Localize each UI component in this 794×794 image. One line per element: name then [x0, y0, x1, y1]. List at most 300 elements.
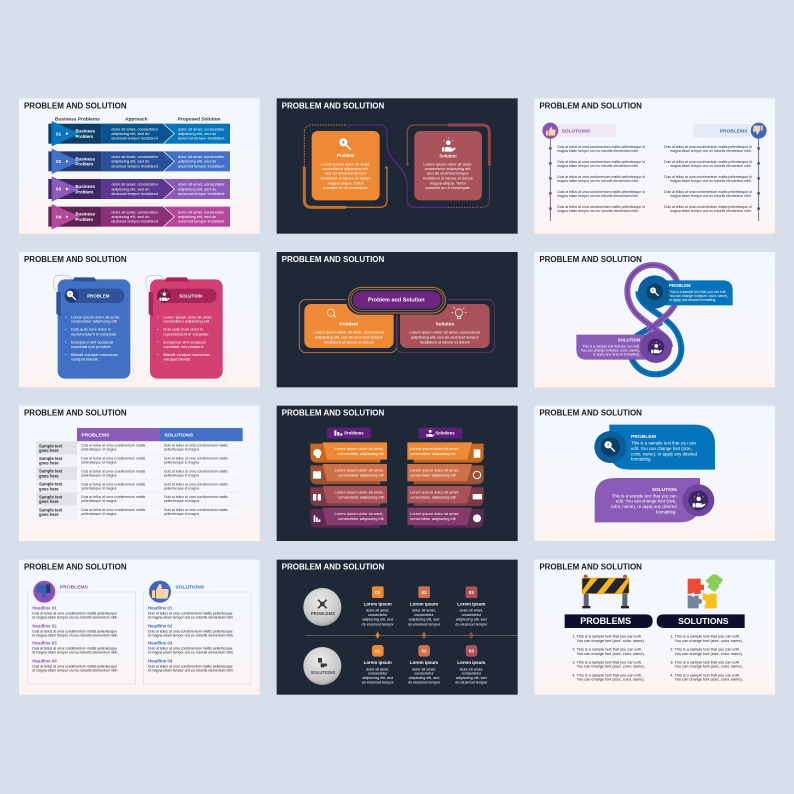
solution item 02: do eiusmod tempor [408, 681, 441, 685]
column headers: Business Problems [55, 117, 100, 123]
solution callout: edit. You can change font (size, [616, 499, 677, 504]
problems column: Duis at tellus at urna condimentum mattis pellentesque id [664, 205, 752, 209]
row 03: adipiscing elit, sed do [111, 186, 150, 191]
solutions column: magna etiam tempor orci eu lobortis elementum nibh. [557, 194, 639, 198]
problem card: posuere ac ut consequat. [323, 185, 368, 190]
solutions panel: Duis at tellus at urna condimentum mattis pellentesque [148, 664, 233, 668]
problem callout [594, 425, 715, 470]
row 03: eiusmod tempor incididunt [178, 191, 225, 196]
problem card: incididunt ut labore et dolore [321, 175, 371, 180]
problem item 02: do eiusmod tempor [408, 622, 441, 626]
row 04: dolor sit amet, consectetur [178, 209, 225, 214]
row 02: eiusmod tempor incididunt [111, 163, 159, 168]
title: PROBLEM AND SOLUTION [24, 562, 127, 571]
problems panel: PROBLEMS [60, 585, 89, 591]
solutions ribbons: consectetur adipiscing elit [410, 516, 457, 521]
problem callout: You can change font(size, color, name), [669, 294, 728, 298]
row labels: goes here [39, 448, 59, 453]
row labels: goes here [39, 499, 59, 504]
solutions column text: Duis at tellus at urna condimentum mattis [164, 444, 228, 448]
problems panel: id magna etiam tempor orci eu lobortis elementum nibh. [32, 651, 118, 655]
problems list: You can change font (size, color, name). [577, 652, 645, 656]
icon: hand with bulb [157, 289, 171, 303]
solutions ribbons: consectetur adipiscing elit [410, 451, 457, 456]
solution card: Solution [436, 322, 454, 327]
row labels: goes here [39, 473, 59, 478]
problem card: Excepteur sint occaecat [71, 339, 114, 344]
solution item 02: consectetur [414, 672, 434, 676]
solutions list: 1. [670, 635, 674, 639]
row 04: Problem [75, 217, 93, 222]
solutions ribbons [407, 442, 484, 528]
slide 2: dark two cards with connector [277, 98, 518, 234]
problems list [572, 635, 645, 682]
solutions banner [657, 614, 745, 628]
solutions list: 4. [670, 673, 674, 677]
problem callout: This is a sample text that you can edit. [669, 290, 726, 294]
problem card: consectetur adipiscing elit, [322, 166, 369, 171]
icon: hand with bulb [693, 494, 706, 507]
solutions list: 2. [670, 648, 674, 652]
problems list: This is a sample text that you can edit. [577, 648, 642, 652]
solution callout [595, 478, 714, 522]
solution item 01: 01 [375, 649, 381, 654]
row 03: 03 [56, 187, 62, 192]
timeline divider [306, 634, 518, 636]
problems column: Duis at tellus at urna condimentum mattis pellentesque id [664, 145, 752, 149]
problem item 03: 03 [469, 590, 474, 595]
icon: hand with bulb [651, 342, 662, 353]
solution card: magna aliqua. Tortor [430, 180, 467, 185]
problems column: PROBLEMS [720, 128, 748, 134]
solutions list: This is a sample text that you can edit. [675, 660, 740, 664]
row labels: goes here [39, 512, 59, 517]
table header: PROBLEMS [81, 432, 110, 438]
problem item 03: adipiscing elit, sed [456, 618, 487, 622]
row 01: Business [75, 129, 96, 134]
row 02: eiusmod tempor incididunt [178, 163, 225, 168]
solutions ribbons: Lorem ipsum dolor sit amet, [410, 511, 459, 516]
slide 11: dark timeline [277, 560, 518, 695]
row 03 [48, 176, 230, 202]
problem item 01: adipiscing elit, sed [362, 618, 393, 622]
problems panel: id magna etiam tempor orci eu lobortis elementum nibh. [32, 668, 118, 672]
row 02: Problem [75, 162, 93, 167]
problem callout: PROBLEM [631, 434, 656, 440]
solution item 01: do eiusmod tempor [362, 681, 394, 685]
solution card: adipiscing elit, sed do eiusmod tempor [411, 334, 480, 339]
purple loop [627, 265, 679, 347]
problems panel: Duis at tellus at urna condimentum mattis pellentesque [32, 612, 117, 616]
solutions panel: id magna etiam tempor orci eu lobortis elementum nibh. [148, 633, 234, 637]
problem item 02: adipiscing elit, sed [409, 618, 439, 622]
problems ribbons: consectetur adipiscing elit [338, 494, 385, 499]
problems column text: Duis at tellus at urna condimentum mattis [81, 457, 145, 461]
solutions column: magna etiam tempor orci eu lobortis elementum nibh. [557, 179, 639, 183]
icon: magnifier [65, 289, 79, 303]
problem item 03 [455, 586, 488, 626]
title: PROBLEM AND SOLUTION [282, 563, 385, 572]
solution item 01 [362, 645, 394, 685]
solution item 02: 02 [421, 649, 427, 654]
solutions column text: pellentesque id magna [164, 461, 199, 465]
row 01: 01 [56, 131, 62, 136]
problem card [304, 304, 394, 348]
solutions list: You can change font (size, color, name). [675, 652, 743, 656]
solution card: Duis aute irure dolor in [163, 327, 203, 332]
solution card: cupidatat non proident. [163, 344, 204, 349]
column headers: Proposed Solution [178, 117, 221, 123]
row labels: Sample text [39, 494, 63, 499]
problems column text: pellentesque id magna [81, 461, 116, 465]
solution item 02: dolor sit amet, [412, 667, 436, 671]
slide 7: comparison table [19, 406, 260, 541]
solutions panel: Duis at tellus at urna condimentum mattis pellentesque [148, 612, 233, 616]
problems list: You can change font (size, color, name). [577, 665, 645, 669]
slide 5: dark joined cards with pill [277, 252, 518, 387]
row 01: eiusmod tempor incididunt [178, 136, 225, 141]
row 04: 04 [56, 214, 62, 219]
icon: road barrier [582, 575, 629, 608]
problems list: 1. [572, 635, 576, 639]
solutions panel: Headline 02 [148, 623, 173, 628]
problem card: Lorem ipsum dolor sit amet, [71, 314, 120, 319]
problems panel: Headline 04 [32, 658, 57, 663]
slide 6: figure-eight diagram [534, 252, 775, 387]
problems column text: Duis at tellus at urna condimentum mattis [81, 482, 145, 486]
solutions panel: id magna etiam tempor orci eu lobortis elementum nibh. [148, 616, 234, 620]
problems column: magna etiam tempor orci eu lobortis elementum nibh. [670, 209, 752, 213]
problems panel: id magna etiam tempor orci eu lobortis elementum nibh. [32, 616, 118, 620]
solution item 01: adipiscing elit, sed [362, 676, 393, 680]
row 03: Problem [75, 189, 93, 194]
problem card: sed do eiusmod tempor [325, 171, 367, 176]
problem item 03: consectetur [462, 613, 482, 617]
problems column: Duis at tellus at urna condimentum mattis pellentesque id [664, 175, 752, 179]
problem item 03: Lorem ipsum [457, 601, 485, 606]
solution card: Excepteur sint occaecat [163, 339, 207, 344]
solutions column: Duis at tellus at urna condimentum mattis pellentesque id [557, 190, 645, 194]
problem card: PROBLEM [87, 293, 110, 298]
icon: thumb up [149, 581, 171, 603]
problem card: Duis aute irure dolor in [71, 327, 111, 332]
center pill [346, 286, 448, 315]
solutions banner: SOLUTIONS [678, 616, 729, 626]
row 02: dolor sit amet, consectetur [111, 154, 159, 159]
solutions column: Duis at tellus at urna condimentum mattis pellentesque id [557, 145, 645, 149]
problem callout: or apply any desired formatting. [669, 298, 716, 302]
problem item 01: dolor sit amet, [366, 609, 389, 613]
problems column: magna etiam tempor orci eu lobortis elementum nibh. [670, 179, 752, 183]
problem card: reprehenderit in voluptate. [71, 331, 117, 336]
blue loop [630, 291, 681, 374]
row labels [39, 443, 63, 517]
solution card: Lorem ipsum dolor sit amet, [163, 314, 213, 319]
solution callout: This is a sample text that you can [612, 494, 677, 499]
problems column text: pellentesque id magna [81, 448, 116, 452]
solutions column text: pellentesque id magna [164, 486, 199, 490]
solutions column: magna etiam tempor orci eu lobortis elementum nibh. [557, 149, 639, 153]
solutions list: You can change font (size, color, name). [675, 665, 743, 669]
solutions ribbons: consectetur adipiscing elit [410, 473, 457, 478]
solutions panel: Duis at tellus at urna condimentum mattis pellentesque [148, 629, 233, 633]
column headers [55, 117, 221, 123]
row 04 [48, 204, 230, 229]
problems sphere [303, 588, 341, 626]
solutions column text: pellentesque id magna [164, 512, 199, 516]
solutions column text: pellentesque id magna [164, 473, 199, 477]
solution item 02: Lorem ipsum [410, 660, 438, 665]
problems ribbons: consectetur adipiscing elit [338, 473, 385, 478]
solutions list: This is a sample text that you can edit. [675, 648, 740, 652]
icon: magnifier outline [327, 309, 336, 317]
slide 10: headline lists [19, 560, 260, 695]
problem card: Problem [339, 322, 358, 327]
problems column text: pellentesque id magna [81, 499, 116, 503]
solutions list: You can change font (size, color, name). [675, 678, 743, 682]
solution callout: formatting. [656, 509, 677, 514]
solutions panel: id magna etiam tempor orci eu lobortis elementum nibh. [148, 651, 234, 655]
problem item 01 [362, 586, 394, 626]
table header [77, 428, 243, 441]
solutions column: Duis at tellus at urna condimentum mattis pellentesque id [557, 175, 645, 179]
solution card [146, 275, 226, 381]
problem callout: PROBLEM [669, 283, 691, 288]
row labels: Sample text [39, 482, 63, 487]
problems column: magna etiam tempor orci eu lobortis elementum nibh. [670, 164, 752, 168]
problems banner [565, 614, 653, 628]
problem item 02: dolor sit amet, [412, 609, 436, 613]
icon: hand with bulb [442, 137, 456, 152]
problem card: consectetur adipiscing elit. [71, 319, 118, 324]
problems column [664, 123, 767, 221]
problems ribbons: consectetur adipiscing elit [338, 451, 385, 456]
solutions list: This is a sample text that you can edit. [675, 673, 740, 677]
solution item 03: dolor sit amet, [460, 667, 483, 671]
problems panel: Duis at tellus at urna condimentum mattis pellentesque [32, 664, 117, 668]
row 02: adipiscing elit, sed do [111, 159, 150, 164]
problems header [327, 428, 371, 439]
solution card: posuere ac ut consequat. [426, 185, 470, 190]
row 02: adipiscing elit, sed do [178, 159, 217, 164]
row labels: Sample text [39, 443, 63, 448]
solutions column text: Duis at tellus at urna condimentum mattis [164, 457, 228, 461]
solution callout: color, name), or apply any desired [611, 504, 677, 509]
problems ribbons: Lorem ipsum dolor sit amet, [334, 489, 384, 494]
problem card: volutpat blandit. [71, 357, 99, 362]
row labels: goes here [39, 461, 59, 466]
row labels: Sample text [39, 469, 63, 474]
solution card: volutpat blandit. [163, 357, 191, 362]
problem item 03: dolor sit amet, [460, 609, 483, 613]
row 01 [48, 121, 230, 146]
solution item 01: consectetur [368, 672, 388, 676]
problems column text: Duis at tellus at urna condimentum mattis [81, 508, 145, 512]
center pill: Problem and Solution [368, 298, 425, 304]
solutions list: This is a sample text that you can edit. [675, 635, 740, 639]
icon: light bulb [451, 307, 467, 319]
problems banner: PROBLEMS [580, 616, 631, 626]
problems column text: Duis at tellus at urna condimentum mattis [81, 444, 145, 448]
table header: SOLUTIONS [164, 432, 194, 438]
problems list: This is a sample text that you can edit. [577, 673, 642, 677]
solutions panel: SOLUTIONS [175, 585, 205, 591]
table [36, 428, 243, 519]
solution card: consectetur adipiscing elit. [163, 319, 210, 324]
problems ribbons: Lorem ipsum dolor sit amet, [334, 511, 384, 516]
problems list: 2. [572, 648, 576, 652]
solution item 03: 03 [469, 649, 474, 654]
icon: magnifier [339, 138, 350, 149]
solution item 02: adipiscing elit, sed [409, 676, 439, 680]
row 02: Business [75, 156, 96, 161]
problems ribbons: Lorem ipsum dolor sit amet, [334, 446, 384, 451]
solution callout: You can change font(size, color, name), [581, 348, 640, 352]
problems list: 3. [572, 660, 576, 664]
problems list: You can change font (size, color, name). [577, 678, 645, 682]
problems column: Duis at tellus at urna condimentum mattis pellentesque id [664, 190, 752, 194]
solution card: incididunt ut labore et dolore [423, 175, 474, 180]
slide 12: barrier and puzzle [534, 560, 775, 695]
solutions column text [164, 444, 228, 516]
problems panel: id magna etiam tempor orci eu lobortis elementum nibh. [32, 633, 118, 637]
solutions ribbons: Lorem ipsum dolor sit amet, [410, 489, 459, 494]
solutions column text: Duis at tellus at urna condimentum mattis [164, 508, 228, 512]
connector lines [304, 125, 489, 207]
solutions column text: pellentesque id magna [164, 448, 199, 452]
solutions column text: pellentesque id magna [164, 499, 199, 503]
row 04: eiusmod tempor incididunt [111, 219, 159, 224]
solutions column text: Duis at tellus at urna condimentum mattis [164, 469, 228, 473]
solution card: Blandit volutpat maecenas [163, 352, 210, 357]
problem card: Problem [337, 153, 354, 158]
solutions ribbons: Lorem ipsum dolor sit amet, [410, 468, 459, 473]
solution callout [576, 331, 672, 363]
solutions panel: Headline 01 [148, 606, 173, 611]
column headers: Approach [125, 117, 148, 123]
problems list: 4. [572, 673, 576, 677]
solutions panel: Duis at tellus at urna condimentum mattis pellentesque [148, 647, 233, 651]
solutions sphere [303, 647, 341, 685]
row 03: dolor sit amet, consectetur [111, 182, 159, 187]
title: PROBLEM AND SOLUTION [539, 409, 642, 418]
problem item 03: do eiusmod tempor [455, 622, 488, 626]
slide 4: two bullet cards [19, 252, 260, 387]
problems column text: Duis at tellus at urna condimentum mattis [81, 495, 145, 499]
solutions panel [143, 581, 251, 684]
solution card: consectetur adipiscing elit, [425, 166, 471, 171]
problems panel: Headline 03 [32, 641, 57, 646]
row 01: eiusmod tempor incididunt [111, 136, 159, 141]
problem callout: This is a sample text that you can [631, 440, 696, 445]
solution item 03: adipiscing elit, sed [456, 676, 487, 680]
solutions column [542, 123, 645, 221]
problem card: cupidatat non proident. [71, 344, 112, 349]
problems column: magna etiam tempor orci eu lobortis elementum nibh. [670, 194, 752, 198]
title: PROBLEM AND SOLUTION [539, 563, 642, 572]
solution card [414, 131, 482, 200]
solution item 03 [455, 645, 488, 685]
problems column: Duis at tellus at urna condimentum mattis pellentesque id [664, 160, 752, 164]
problems ribbons: consectetur adipiscing elit [338, 516, 385, 521]
solution card: sed do eiusmod tempor [427, 171, 469, 176]
problems column text: Duis at tellus at urna condimentum mattis [81, 469, 145, 473]
problems column text: pellentesque id magna [81, 512, 116, 516]
problem item 01: do eiusmod tempor [362, 622, 394, 626]
title: PROBLEM AND SOLUTION [282, 255, 385, 264]
solutions ribbons: Lorem ipsum dolor sit amet, [410, 446, 459, 451]
solution callout: SOLUTION [618, 337, 640, 342]
solutions panel: Headline 04 [148, 658, 173, 663]
row 02: dolor sit amet, consectetur [178, 154, 225, 159]
icon: thumb down [751, 123, 767, 139]
title: PROBLEM AND SOLUTION [282, 101, 385, 110]
problems panel: Headline 01 [32, 606, 57, 611]
problems column: magna etiam tempor orci eu lobortis elementum nibh. [670, 149, 752, 153]
icon: magnifier [605, 441, 614, 451]
problems panel [28, 580, 136, 684]
solutions header [419, 428, 462, 439]
solutions list [670, 635, 743, 682]
problem item 01: consectetur [368, 613, 388, 617]
solution card: Lorem ipsum dolor sit amet, [423, 161, 473, 166]
title: PROBLEM AND SOLUTION [539, 101, 642, 110]
problems sphere: PROBLEMS [311, 611, 335, 616]
solution item 01: Lorem ipsum [364, 660, 392, 665]
solutions column text: Duis at tellus at urna condimentum mattis [164, 482, 228, 486]
slide 1: arrow rows [19, 98, 260, 234]
problem callout: color, name), or apply any desired [631, 451, 697, 456]
solution item 03: do eiusmod tempor [455, 681, 488, 685]
problems column text: pellentesque id magna [81, 486, 116, 490]
slide 9: two callout shapes [534, 406, 775, 541]
problems header: Problems [344, 431, 364, 436]
solution card: Solution [439, 153, 457, 158]
solutions column: Duis at tellus at urna condimentum mattis pellentesque id [557, 205, 645, 209]
row 04: adipiscing elit, sed do [178, 214, 217, 219]
row 01: dolor sit amet, consectetur [178, 126, 225, 131]
row 01: adipiscing elit, sed do [111, 131, 150, 136]
row 04: Business [75, 212, 96, 217]
solutions list: 3. [670, 660, 674, 664]
row 03: dolor sit amet, consectetur [178, 182, 225, 187]
row 02: 02 [56, 159, 62, 164]
timeline diamonds [375, 632, 474, 639]
solution item 03: consectetur [462, 672, 482, 676]
title: PROBLEM AND SOLUTION [539, 255, 642, 264]
solution callout: This is a sample text that you can edit. [583, 344, 640, 348]
row labels: Sample text [39, 507, 63, 512]
solution item 03: Lorem ipsum [457, 660, 485, 665]
solutions ribbons: consectetur adipiscing elit [410, 494, 457, 499]
solutions list: You can change font (size, color, name). [675, 639, 743, 643]
row 01: dolor sit amet, consectetur [111, 126, 159, 131]
row 04: dolor sit amet, consectetur [111, 209, 159, 214]
problems list: This is a sample text that you can edit. [577, 635, 642, 639]
solution card: incididunt ut labore et dolore [420, 339, 471, 344]
row 01: Problem [75, 134, 93, 139]
problem item 01: Lorem ipsum [364, 601, 392, 606]
solution card: Lorem ipsum dolor sit amet, consectetur [410, 330, 481, 335]
solutions column: Duis at tellus at urna condimentum mattis pellentesque id [557, 160, 645, 164]
solution item 01: dolor sit amet, [366, 667, 389, 671]
row 03: eiusmod tempor incididunt [111, 191, 159, 196]
row 03: Business [75, 184, 96, 189]
problem item 02: 02 [421, 590, 427, 595]
problems list: This is a sample text that you can edit. [577, 660, 642, 664]
problems panel: Headline 02 [32, 623, 57, 628]
problems ribbons: Lorem ipsum dolor sit amet, [334, 468, 384, 473]
